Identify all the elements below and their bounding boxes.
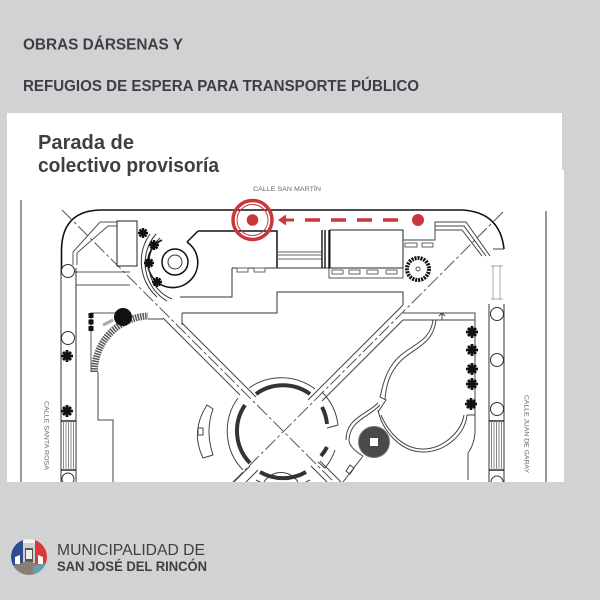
panel heading: Parada de xyxy=(38,132,134,154)
street labels xyxy=(42,184,530,474)
right garden trees xyxy=(465,326,478,410)
panel heading xyxy=(38,132,220,177)
building xyxy=(237,230,433,278)
title: REFUGIOS DE ESPERA PARA TRANSPORTE PÚBLICO xyxy=(23,76,419,95)
right road xyxy=(489,265,504,488)
street labels: CALLE SANTA ROSA xyxy=(42,401,50,471)
footer wordmark: SAN JOSÉ DEL RINCÓN xyxy=(57,559,207,574)
red stop marker xyxy=(233,200,272,240)
street labels: CALLE JUAN DE GARAY xyxy=(522,395,530,474)
sheet border lines xyxy=(21,200,546,482)
plaza edge lines xyxy=(180,268,403,313)
right garden xyxy=(343,313,475,482)
title xyxy=(23,34,419,95)
footer wordmark: MUNICIPALIDAD DE xyxy=(57,542,205,559)
diagonal walkways xyxy=(163,305,403,491)
top right corner steps xyxy=(403,222,504,256)
panel: white plan sheet xyxy=(7,113,564,482)
top left corner steps xyxy=(71,222,130,285)
left road xyxy=(61,264,76,485)
walkway lines between buildings xyxy=(277,252,322,259)
curved bench xyxy=(197,405,213,458)
street plan xyxy=(21,184,546,491)
gear tree xyxy=(407,258,429,280)
corner kiosk xyxy=(117,221,137,266)
left road trees xyxy=(61,350,73,417)
street labels: CALLE SAN MARTÍN xyxy=(253,184,321,193)
dark round planter xyxy=(358,426,390,458)
title: OBRAS DÁRSENAS Y xyxy=(23,34,183,54)
round plaza top left xyxy=(141,234,198,301)
footer logo xyxy=(11,539,47,575)
block outline xyxy=(62,210,504,268)
trees along plaza xyxy=(138,228,162,287)
diagonal axes xyxy=(62,210,503,490)
panel heading: colectivo provisoría xyxy=(38,155,220,177)
red dashed arrow xyxy=(278,214,424,226)
stop platform outline xyxy=(187,231,277,268)
central roundabout xyxy=(227,378,338,487)
footer wordmark xyxy=(57,542,207,574)
left plaza arc xyxy=(91,308,163,482)
